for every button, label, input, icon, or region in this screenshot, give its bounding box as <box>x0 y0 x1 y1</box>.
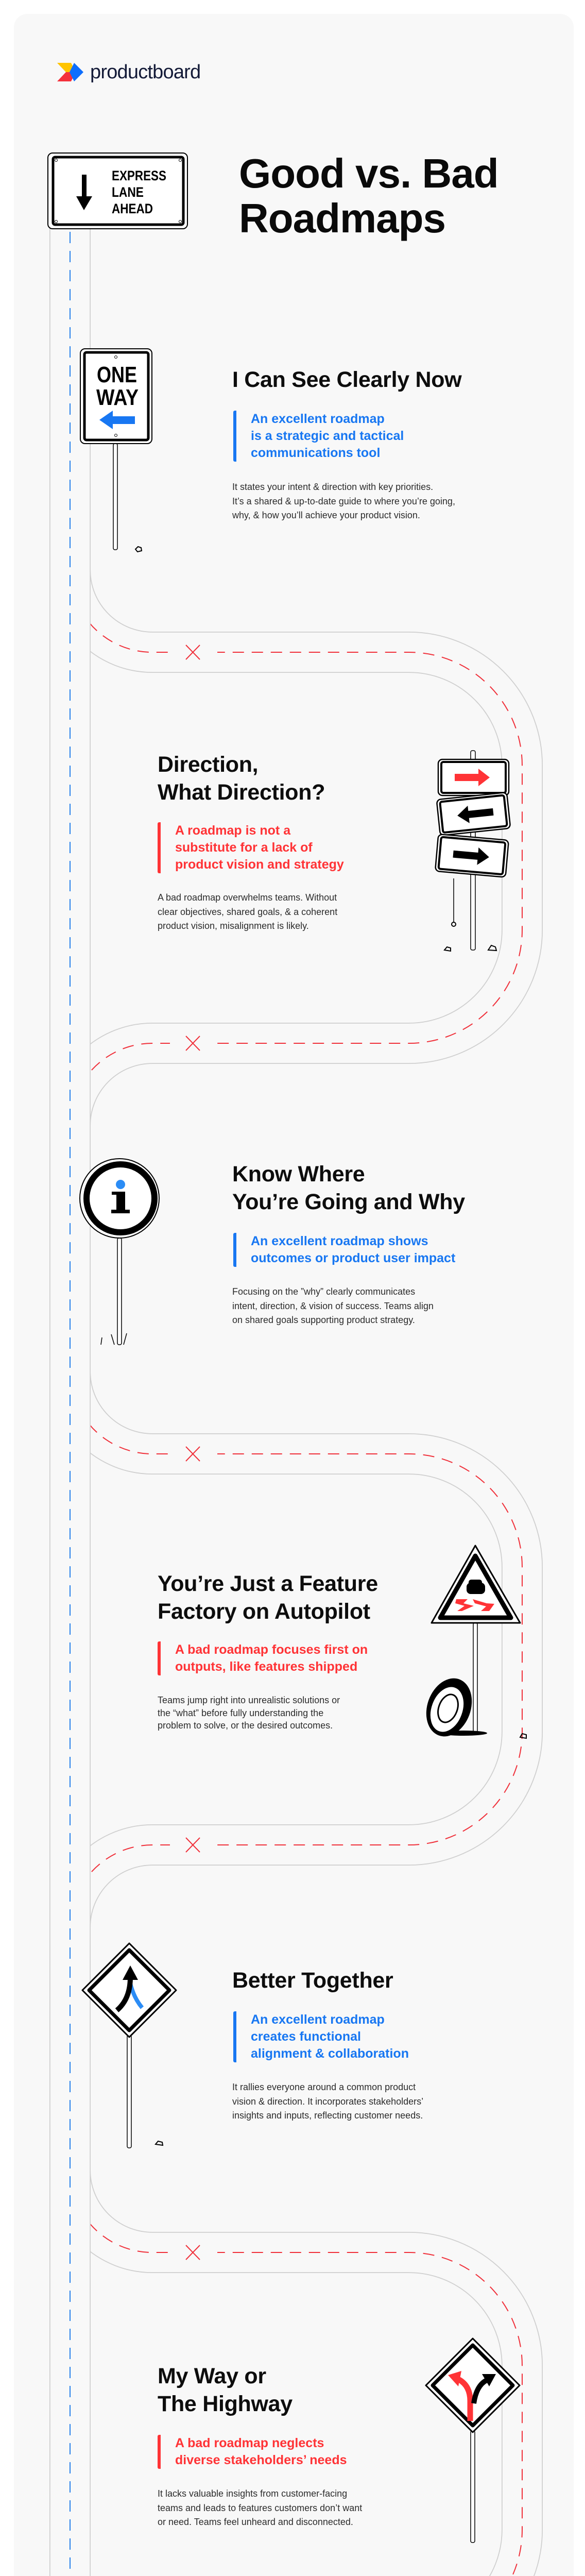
section 4 heading: Factory on Autopilot <box>158 1599 370 1624</box>
section 6 body: It lacks valuable insights from customer-facing <box>158 2488 347 2499</box>
logo: productboard <box>90 61 200 83</box>
section 5 quote: alignment & collaboration <box>251 2046 409 2061</box>
section 2 quote: substitute for a lack of <box>175 840 313 855</box>
section 1 quote: communications tool <box>251 446 380 460</box>
section 5 body: vision & direction. It incorporates stakeholders’ <box>232 2096 423 2106</box>
section 3 body: intent, direction, & vision of success. Teams align <box>232 1300 434 1311</box>
section 2 quote <box>158 822 344 873</box>
section 2 heading: Direction, <box>158 752 258 777</box>
sign: mixed direction arrows <box>435 751 510 951</box>
section 1 body: why, & how you’ll achieve your product vision. <box>232 510 420 520</box>
section 3 body: on shared goals supporting product strategy. <box>232 1315 415 1325</box>
roads <box>70 226 522 2576</box>
section 4 body: Teams jump right into unrealistic solutions or <box>158 1695 340 1705</box>
sign: express lane ahead: LANE <box>112 184 144 200</box>
section 3 quote: An excellent roadmap shows <box>251 1234 428 1248</box>
section 2 quote: product vision and strategy <box>175 857 344 872</box>
section 2 quote: A roadmap is not a <box>175 823 290 838</box>
section 6 body <box>158 2488 363 2527</box>
sign: information <box>80 1159 159 1345</box>
section 1 body: It’s a shared & up-to-date guide to where you’re going, <box>232 496 455 506</box>
road: detour 1 <box>70 570 522 1126</box>
section 4 body: problem to solve, or the desired outcomes. <box>158 1720 333 1731</box>
section 4 body: the “what” before fully understanding the <box>158 1707 323 1718</box>
road: detour 3 <box>70 2170 522 2576</box>
section 3 quote: outcomes or product user impact <box>251 1251 455 1265</box>
section 3 heading: Know Where <box>232 1162 365 1187</box>
section 2 body: product vision, misalignment is likely. <box>158 921 309 931</box>
section 5 quote: An excellent roadmap <box>251 2012 385 2027</box>
section 4 quote: outputs, like features shipped <box>175 1659 357 1674</box>
section 4 quote: A bad roadmap focuses first on <box>175 1642 368 1657</box>
section 2 heading <box>158 752 325 805</box>
section 1 body <box>232 482 455 520</box>
section 1 heading: I Can See Clearly Now <box>232 367 461 392</box>
sign: express lane ahead: EXPRESS <box>112 168 166 183</box>
section 6 quote: diverse stakeholders’ needs <box>175 2453 347 2467</box>
title <box>239 150 498 241</box>
section 6 heading: The Highway <box>158 2392 292 2416</box>
section 4 quote <box>158 1641 368 1675</box>
section 6 body: teams and leads to features customers don’t want <box>158 2503 362 2513</box>
sign: slippery road with tire <box>419 1546 526 1743</box>
section 2 body: clear objectives, shared goals, & a coherent <box>158 907 337 917</box>
section 3 quote <box>233 1233 455 1267</box>
sign: express lane ahead: AHEAD <box>112 201 153 216</box>
sign: merge <box>82 1943 176 2148</box>
sign: one way: ONE <box>97 362 137 387</box>
section 2 body: A bad roadmap overwhelms teams. Without <box>158 892 337 903</box>
section 6 body: or need. Teams feel unheard and disconnected. <box>158 2517 353 2527</box>
section 5 heading: Better Together <box>232 1968 393 1993</box>
section 6 quote <box>158 2435 347 2469</box>
section 3 heading: You’re Going and Why <box>232 1190 465 1214</box>
X marks on bad detours <box>170 645 217 2576</box>
section 1 body: It states your intent & direction with key priorities. <box>232 482 433 492</box>
sign: express lane ahead <box>48 153 187 229</box>
sign: one way: WAY <box>96 385 139 410</box>
section 5 body <box>232 2082 423 2121</box>
road: main excellent road <box>49 228 91 2576</box>
section 2 body <box>158 892 338 931</box>
section 5 body: insights and inputs, reflecting customer needs. <box>232 2110 423 2121</box>
section 3 heading <box>232 1162 465 1214</box>
section 4 heading <box>158 1571 378 1624</box>
sign: fork <box>426 2338 520 2543</box>
section 3 body: Focusing on the ”why” clearly communicates <box>232 1286 415 1297</box>
section 5 body: It rallies everyone around a common product <box>232 2082 416 2092</box>
section 4 body <box>158 1695 340 1731</box>
section 6 heading: My Way or <box>158 2364 266 2388</box>
section 2 heading: What Direction? <box>158 780 325 805</box>
title: Good vs. Bad <box>239 150 498 196</box>
section 1 quote: An excellent roadmap <box>251 412 385 426</box>
sign: one way <box>80 349 152 552</box>
road: detour 2 <box>70 1371 522 1927</box>
section 1 quote: is a strategic and tactical <box>251 429 404 443</box>
section 4 heading: You’re Just a Feature <box>158 1571 378 1596</box>
section 1 quote <box>233 411 404 462</box>
section 6 heading <box>158 2364 292 2416</box>
title: Roadmaps <box>239 195 445 241</box>
section 5 quote: creates functional <box>251 2029 361 2044</box>
section 5 quote <box>233 2011 409 2062</box>
section 6 quote: A bad roadmap neglects <box>175 2436 324 2450</box>
section 3 body <box>232 1286 434 1325</box>
